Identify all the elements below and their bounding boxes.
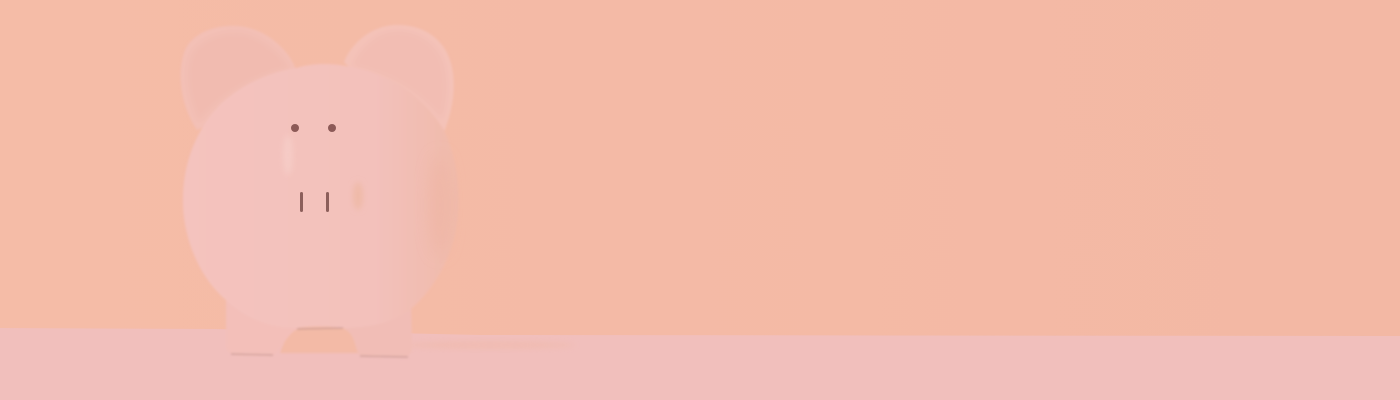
- left eye: [291, 124, 299, 132]
- right eye: [328, 124, 336, 132]
- belly underside line: [297, 328, 343, 329]
- right nostril: [326, 192, 329, 212]
- table surface: [0, 328, 1400, 400]
- snout highlight: [353, 182, 363, 210]
- left nostril: [300, 192, 303, 212]
- gap between legs: [280, 328, 362, 353]
- glossy reflection: [283, 135, 293, 175]
- left ear: [181, 26, 296, 130]
- body: [183, 64, 458, 328]
- body shading on right: [430, 155, 450, 255]
- piggy shadow on table: [405, 341, 575, 349]
- piggy bank: [181, 25, 458, 357]
- left ear inner: [187, 32, 290, 122]
- left leg: [226, 300, 300, 356]
- right leg: [342, 300, 412, 357]
- right foot line: [360, 356, 408, 357]
- left foot line: [231, 354, 273, 355]
- right ear: [344, 25, 454, 132]
- right ear inner: [352, 31, 447, 120]
